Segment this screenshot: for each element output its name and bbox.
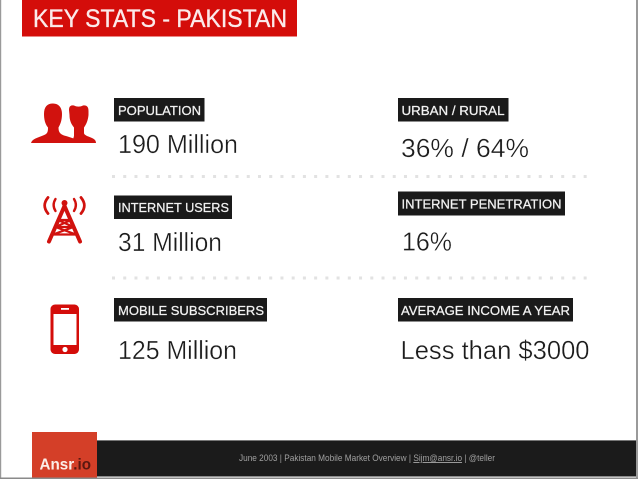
stat: internet penetration [398,192,565,256]
stat: population: POPULATION [118,103,201,118]
stat: average income: AVERAGE INCOME A YEAR [401,303,570,318]
icon: people [31,104,96,143]
logo: Ansr.io [40,456,91,474]
stat: mobile subscribers: 125 Million [118,335,237,365]
stat: mobile subscribers [114,298,267,365]
stat: average income [398,298,590,365]
icon: mobile phone [50,304,79,354]
stat: mobile subscribers: MOBILE SUBSCRIBERS [118,303,264,318]
footer bar: June 2003 | Pakistan Mobile Market Overview | Sijm@ansr.io | @teller [239,453,495,464]
stat: urban / rural: 36% / 64% [401,133,529,163]
stat: internet penetration: 16% [402,226,452,256]
logo [32,432,97,478]
stat: urban / rural: URBAN / RURAL [402,103,504,118]
stat: urban / rural [398,98,529,163]
stat: population: 190 Million [118,129,238,159]
footer bar [97,440,636,476]
icon: signal tower [45,198,84,242]
stat: average income: Less than $3000 [400,335,590,365]
stat: internet penetration: INTERNET PENETRATION [402,196,562,212]
stat: population [114,98,238,159]
stat: internet users: INTERNET USERS [118,200,229,215]
title banner: KEY STATS - PAKISTAN [33,5,287,33]
stat: internet users: 31 Million [118,227,222,257]
stat: internet users [114,196,232,257]
